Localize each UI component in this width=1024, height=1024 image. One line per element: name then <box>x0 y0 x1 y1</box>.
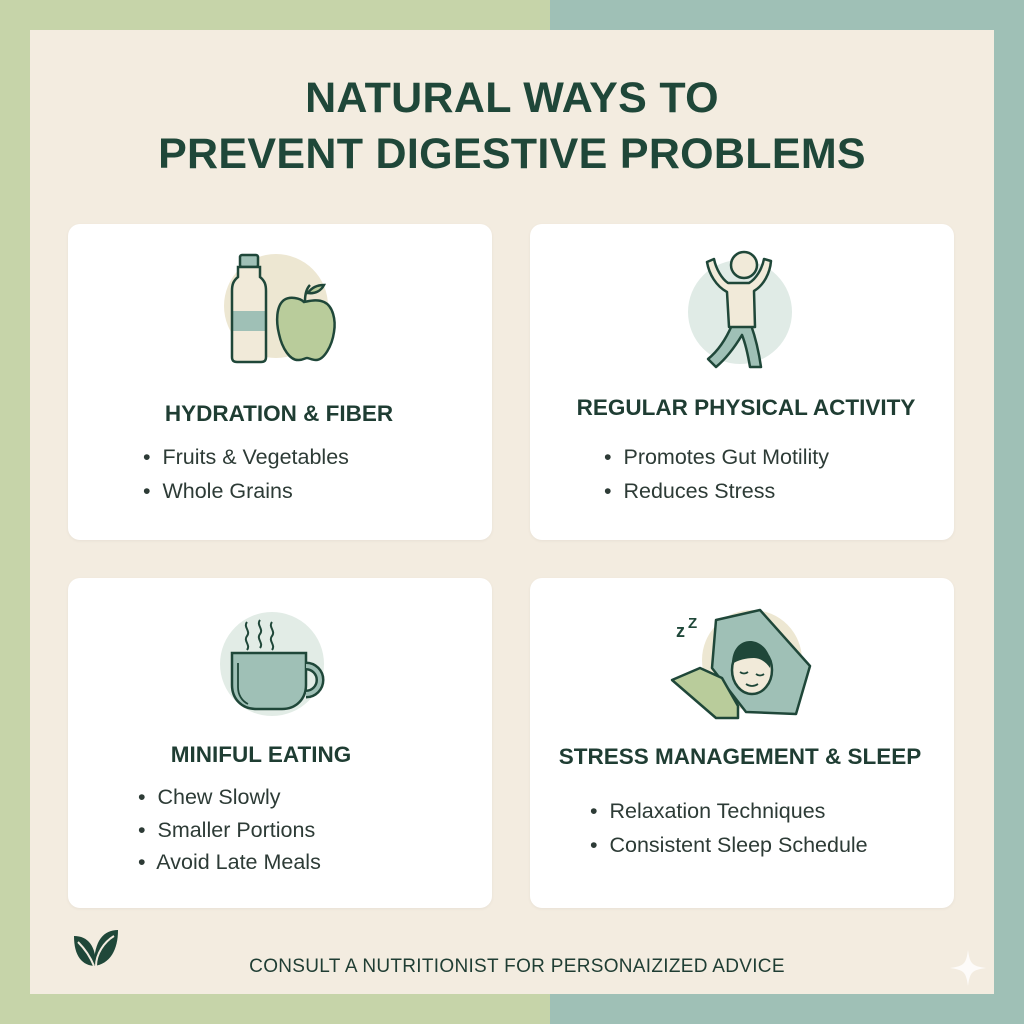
bullets: • Whole Grains <box>143 479 293 503</box>
bullets: • Promotes Gut Motility <box>604 445 829 469</box>
title: PREVENT DIGESTIVE PROBLEMS <box>158 130 866 178</box>
bullets: • Relaxation Techniques <box>590 799 825 823</box>
icon: sleeping person: Z <box>688 615 697 632</box>
icon: tea cup <box>220 612 324 716</box>
bullets <box>143 445 349 503</box>
bullets: • Fruits & Vegetables <box>143 445 349 469</box>
bullets <box>138 785 321 874</box>
title: NATURAL WAYS TO <box>305 74 719 122</box>
bullets: • Avoid Late Meals <box>138 850 321 874</box>
card: physical activity <box>530 224 954 540</box>
bullets: • Reduces Stress <box>604 479 775 503</box>
icon: dancing person <box>688 250 792 368</box>
bullets: • Chew Slowly <box>138 785 281 809</box>
heading: MINIFUL EATING <box>171 742 351 767</box>
heading: REGULAR PHYSICAL ACTIVITY <box>577 395 915 420</box>
icon: sparkle <box>951 951 985 985</box>
bullets <box>604 445 829 503</box>
icon: leaf logo <box>74 930 118 966</box>
title <box>158 74 866 178</box>
card: hydration & fiber <box>68 224 492 540</box>
icon: sleeping person <box>670 608 812 720</box>
bullets <box>590 799 868 857</box>
bullets: • Smaller Portions <box>138 818 315 842</box>
card: stress & sleep <box>530 578 954 908</box>
heading: HYDRATION & FIBER <box>165 401 393 426</box>
icon: sleeping person: z <box>676 621 685 641</box>
icon: bottle and apple <box>224 254 336 364</box>
bullets: • Consistent Sleep Schedule <box>590 833 868 857</box>
heading: STRESS MANAGEMENT & SLEEP <box>559 744 921 769</box>
card: mindful eating <box>68 578 492 908</box>
footer text: CONSULT A NUTRITIONIST FOR PERSONAIZIZED ADVICE <box>249 956 785 977</box>
